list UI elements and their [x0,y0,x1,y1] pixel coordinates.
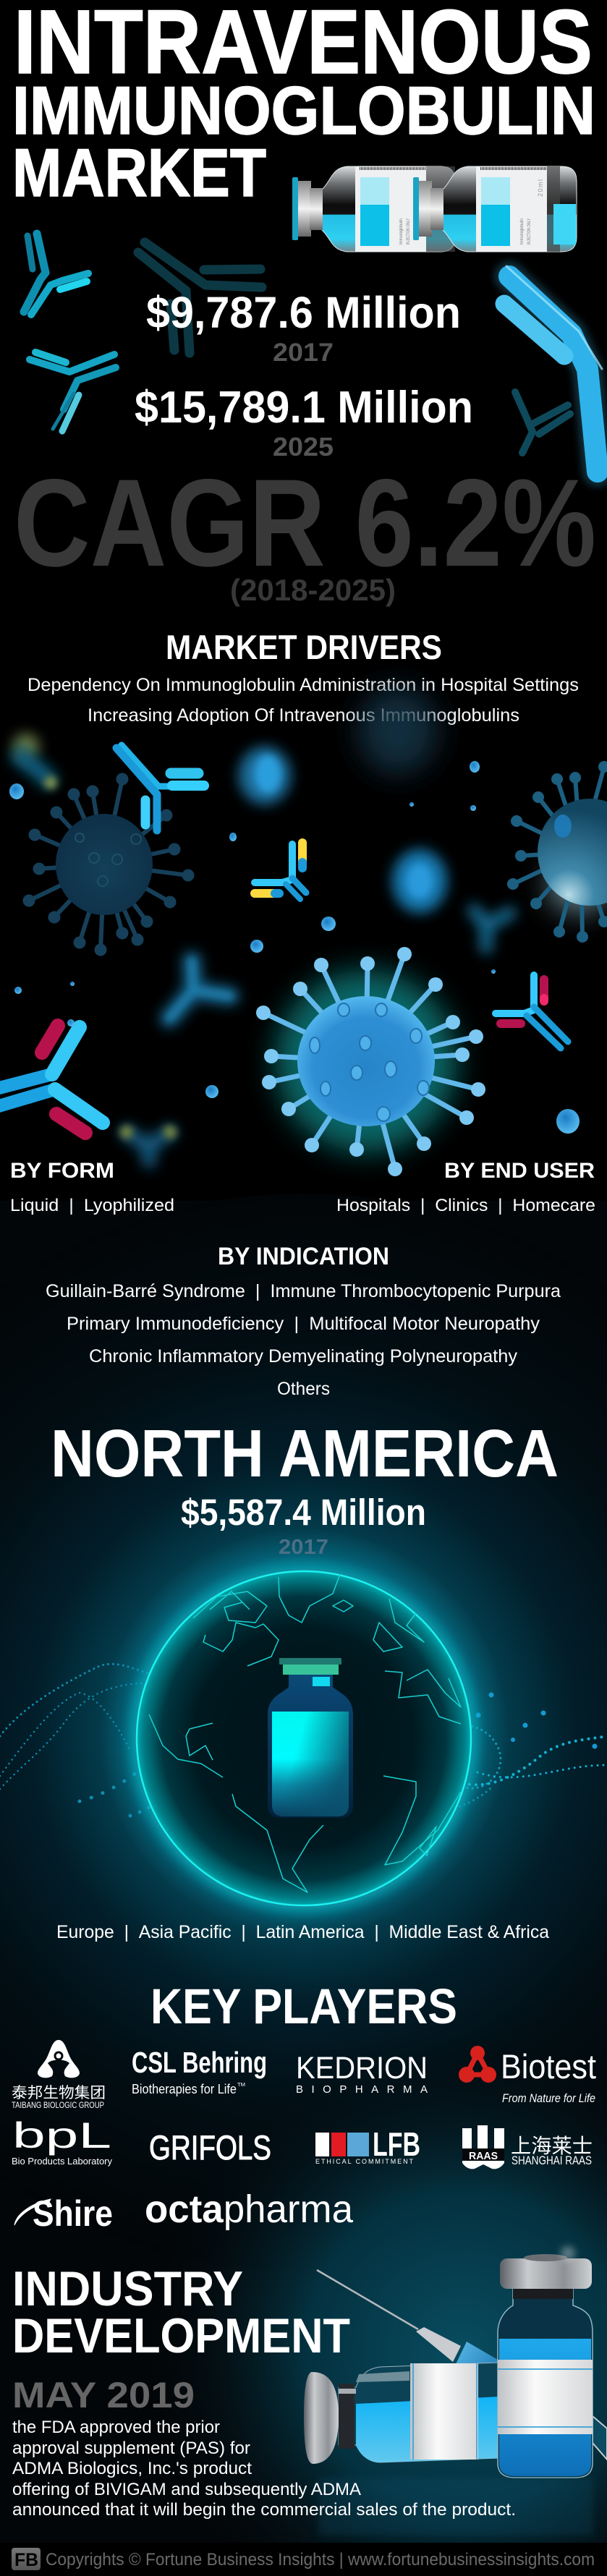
market value 2025: $15,789.1 Million [135,383,473,433]
CAGR: (2018-2025) [230,573,396,607]
reflection [318,2478,593,2535]
icon: dark antibody right [515,392,570,453]
icon: lying vial [304,2363,499,2464]
blurred cells [13,687,510,1161]
market value 2017: $9,787.6 Million [146,288,461,337]
icon: antibody mid left [30,352,116,431]
panel: virus illustration [0,687,607,1169]
north america heading: NORTH AMERICA [51,1416,559,1491]
north america heading [51,1416,559,1559]
icon: large red antibody left [0,1026,103,1133]
logo: CSL Behring: CSL Behring [132,2046,267,2079]
globe body [137,1571,471,1905]
icon: back vial [292,166,455,252]
logo: Grifols: GRIFOLS [149,2128,271,2167]
by form: Liquid | Lyophilized [10,1196,174,1215]
by indication: Primary Immunodeficiency | Multifocal Motor Neuropathy [67,1314,540,1334]
logo: Shanghai RAAS: RAAS [469,2150,498,2162]
by indication: Chronic Inflammatory Demyelinating Polyneuropathy [89,1346,518,1366]
icon: Fortune Business Insights logo: FB [14,2550,38,2570]
market drivers: Increasing Adoption Of Intravenous Immunoglobulins [88,705,519,726]
logo: BPL: Bio Products Laboratory [12,2156,113,2167]
description: announced that it will begin the commercial sales of the product. [12,2500,516,2520]
date: MAY 2019 [12,2375,195,2415]
panel: industry development [12,2246,607,2535]
icon: two horizontal vials [292,166,577,252]
heading: KEY PLAYERS [150,1978,457,2034]
logo: Kedrion: BIOPHARMA [296,2083,428,2096]
icon: front vial: Immunoglobulin [520,218,525,245]
icon: syringe [317,2270,607,2460]
icon: main virus [263,954,478,1169]
logo: Kedrion: KEDRION [296,2051,428,2086]
logo: Taibang: TAIBANG BIOLOGIC GROUP [12,2100,104,2110]
logo: Biotest [459,2046,596,2105]
icon: large antibody right [504,266,602,472]
market value 2025 [135,383,473,462]
logo: LFB: ETHICAL COMMITMENT [315,2158,414,2165]
market value 2017 [146,288,461,367]
icon: front vial [413,166,577,252]
market drivers: MARKET DRIVERS [166,628,442,666]
logo: CSL Behring: Biotherapies for Life [132,2082,237,2096]
logo: LFB: LFB [373,2125,420,2163]
by form [10,1159,174,1215]
description: the FDA approved the prior [12,2418,220,2437]
logo: Biotest: Biotest [501,2047,596,2086]
logo: Shire: Shire [33,2193,113,2234]
market drivers: Dependency On Immunoglobulin Administration in Hospital Settings [27,675,579,695]
logo: Shanghai RAAS [462,2125,593,2169]
globe ring [137,1571,471,1905]
logo: Octapharma: octapharma [145,2188,354,2231]
north america heading: $5,587.4 Million [181,1492,426,1533]
icon: front vial: INJECTION ONLY [527,218,532,245]
north america heading: 2017 [279,1536,328,1559]
particle waves [0,1664,607,1816]
logo: CSL Behring: TM [237,2083,245,2088]
description: approval supplement (PAS) for [12,2439,250,2458]
market drivers [27,628,579,726]
heading [12,2261,350,2363]
description [12,2418,516,2520]
icon: antibody top left [24,234,88,315]
icon: upright vial [498,2246,593,2478]
footer [0,2543,607,2576]
icon: right virus [513,767,607,937]
market value 2017: 2017 [273,339,334,367]
by indication: Others [277,1379,330,1399]
logo: LFB [315,2125,420,2165]
icon: glowing vial [268,1658,353,1818]
logo: BPL [12,2115,113,2167]
key players [12,1978,596,2234]
by form: BY FORM [10,1159,114,1183]
icon: dark antibody [138,242,262,353]
logo: Taibang [12,2040,106,2110]
heading: DEVELOPMENT [12,2308,350,2363]
by indication [46,1243,561,1399]
logo: Shanghai RAAS: 上海莱士 [511,2135,593,2157]
title [12,0,595,211]
by end user [336,1159,595,1215]
icon: dark virus [29,779,188,950]
icon: yellow antibody [255,843,306,899]
description: offering of BIVIGAM and subsequently ADMA [12,2480,361,2499]
heading: INDUSTRY [12,2261,243,2316]
logo: Taibang: 泰邦生物集团 [12,2085,106,2101]
droplets [9,761,580,1134]
icon: blue antibody [116,745,204,830]
icon: red antibody right [496,975,568,1048]
market value 2025: 2025 [273,432,334,462]
by end user: Hospitals | Clinics | Homecare [336,1196,595,1215]
description: ADMA Biologics, Inc.'s product [12,2459,252,2478]
title: MARKET [12,135,266,211]
continents [149,1574,461,1892]
by indication: Guillain-Barré Syndrome | Immune Thrombocytopenic Purpura [46,1281,561,1301]
regions: Europe | Asia Pacific | Latin America | Middle East & Africa [56,1922,549,1942]
by indication: BY INDICATION [218,1243,389,1270]
panel: globe [0,1571,607,1905]
icon: front vial: 20ml [537,179,544,197]
icon: back vial: INJECTION ONLY [407,218,411,245]
logo: BPL: bpL [12,2115,111,2156]
icon: back vial: Immunoglobulin [399,218,404,245]
logo: CSL Behring [132,2046,267,2096]
by end user: BY END USER [444,1159,595,1183]
